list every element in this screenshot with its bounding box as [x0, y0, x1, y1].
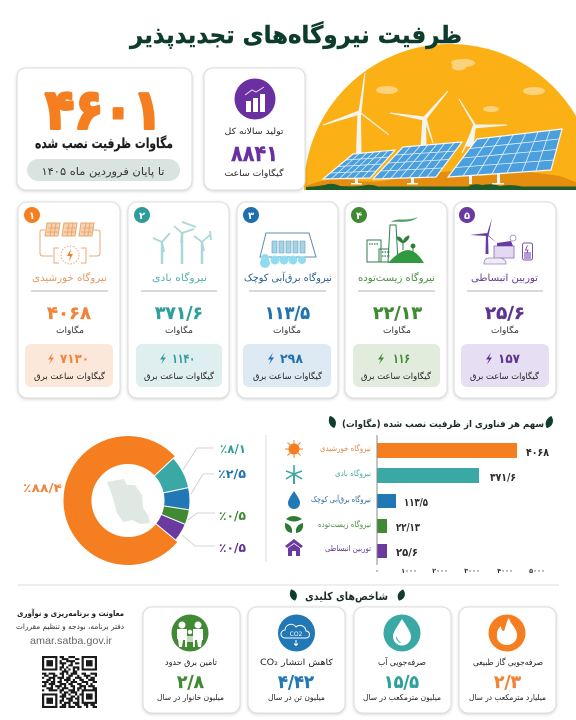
capacity value: ۴۰۶۸ [47, 303, 91, 324]
bar labels: نیروگاه برق‌آبی کوچک [311, 494, 371, 504]
plant name: نیروگاه زیست‌توده [358, 272, 435, 284]
energy box: گیگاوات ساعت برق [144, 371, 215, 382]
panel: installed capacity [17, 68, 192, 190]
badge 5: ۵ [464, 211, 470, 222]
illustration: sun, wind turbines and solar panels [304, 44, 576, 190]
capacity unit: مگاوات [383, 325, 411, 336]
panel: organization info [16, 608, 124, 707]
capacity caption: مگاوات ظرفیت نصب شده [35, 135, 173, 152]
capacity unit: مگاوات [165, 325, 193, 336]
badge 3 [243, 207, 259, 223]
icon: hydro dam [260, 233, 316, 268]
indicator value: ۴/۴۲ [278, 672, 314, 693]
date pill [27, 159, 180, 181]
icon: recycle leaves [285, 516, 303, 533]
bar labels: نیروگاه بادی [335, 468, 371, 478]
capacity unit: مگاوات [56, 325, 84, 336]
panel: households supplied [143, 607, 240, 713]
axis ticks: ۵۰۰۰ [529, 567, 545, 575]
capacity value: ۱۱۳/۵ [265, 303, 310, 324]
energy box: ۱۱۴۰ [172, 352, 195, 367]
plant name: نیروگاه خورشیدی [32, 272, 107, 284]
office name: دفتر برنامه، بودجه و تنظیم مقررات [16, 622, 124, 631]
indicator value: ۲/۳ [494, 672, 521, 693]
bar labels [311, 443, 371, 553]
icon: solar panels and battery [40, 223, 100, 264]
bar values: ۳۷۱/۶ [490, 471, 516, 484]
icon: house [285, 539, 303, 556]
bar labels: نیروگاه زیست‌توده [318, 519, 371, 529]
capacity unit: مگاوات [491, 325, 519, 336]
axis ticks: ۴۰۰۰ [497, 567, 513, 575]
indicator label: کاهش انتشار CO₂ [260, 658, 334, 668]
icon: family [172, 614, 208, 652]
panel: organization info: معاونت و برنامه‌ریزی و نوآوری [17, 608, 124, 618]
energy box [25, 344, 113, 387]
panel: natural gas saving [459, 607, 556, 713]
icon: water drop [288, 491, 300, 509]
donut chart [23, 436, 246, 566]
indicator label: صرفه‌جویی گاز طبیعی [473, 657, 543, 668]
annual label: تولید سالانه کل [224, 127, 284, 137]
panel: expansion turbine [454, 202, 556, 398]
panel: water saving [354, 607, 451, 713]
axis ticks: ۲۰۰۰ [432, 567, 448, 575]
date pill: تا پایان فروردین ماه ۱۴۰۵ [42, 166, 165, 178]
axis ticks: ۱۰۰۰ [401, 567, 417, 575]
bar values [396, 446, 549, 559]
bar values: ۱۱۳/۵ [404, 496, 428, 509]
indicator unit: میلیون تن در سال [268, 693, 325, 702]
bar labels: نیروگاه خورشیدی [320, 443, 371, 453]
panel: annual production [204, 68, 305, 190]
icon: leaf [327, 415, 338, 429]
donut percentage labels: ٪۸۸/۴ [23, 481, 62, 495]
panel: solar plant [18, 202, 120, 398]
energy box [136, 344, 222, 387]
indicator unit: میلیون خانوار در سال [157, 693, 224, 702]
capacity value: ۲۵/۶ [485, 303, 525, 324]
capacity unit: مگاوات [273, 325, 301, 336]
donut percentage labels: ٪۰/۵ [219, 509, 246, 523]
indicator unit: میلیون مترمکعب در سال [363, 693, 441, 702]
icon: wind turbine [286, 465, 302, 484]
bar labels: توربین انبساطی [325, 544, 371, 553]
heading: technology share [327, 415, 555, 430]
plant name: توربین انبساطی [471, 273, 538, 284]
indicator value: ۲/۸ [177, 672, 204, 693]
energy box [353, 344, 440, 387]
bar values: ۴۰۶۸ [526, 446, 549, 459]
plant name: نیروگاه برق‌آبی کوچک [244, 271, 332, 284]
bar values: ۲۵/۶ [396, 546, 418, 559]
donut percentage labels: ٪۰/۵ [219, 541, 246, 555]
panel: small hydro plant [237, 202, 338, 398]
axis ticks: ۳۰۰۰ [464, 567, 480, 575]
energy box: گیگاوات ساعت برق [361, 371, 432, 382]
badge 1: ۱ [29, 211, 35, 222]
heading: technology share: سهم هر فناوری از ظرفیت نصب شده (مگاوات) [342, 418, 544, 430]
indicator value: ۱۵/۵ [384, 672, 419, 693]
icon: wind turbines [153, 222, 211, 264]
panel: CO2 reduction [248, 607, 345, 713]
icon: province map [107, 479, 150, 524]
energy box: ۷۱۳۰ [60, 352, 89, 367]
energy box: گیگاوات ساعت برق [470, 371, 540, 382]
panel: biomass plant [345, 202, 447, 398]
plant name: نیروگاه بادی [152, 272, 207, 284]
energy box [243, 344, 331, 387]
energy box: گیگاوات ساعت برق [34, 371, 106, 382]
title: ظرفیت نیروگاه‌های تجدیدپذیر [129, 21, 462, 49]
panel: wind plant [128, 202, 229, 398]
badge 4 [351, 207, 367, 223]
QR code [42, 657, 97, 707]
bar values: ۲۲/۱۳ [396, 521, 420, 534]
capacity value: ۳۷۱/۶ [155, 303, 203, 324]
annual unit: گیگاوات ساعت [224, 168, 285, 179]
bar chart [311, 435, 549, 575]
badge 1 [24, 207, 40, 223]
icon: turbine, house, battery [470, 218, 532, 264]
axis ticks [375, 567, 545, 575]
indicator unit: میلیارد مترمکعب در سال [469, 693, 546, 702]
icon: water drop [384, 614, 420, 652]
website: amar.satba.gov.ir [30, 635, 113, 647]
big number 4601: ۴۶۰۱ [45, 78, 162, 142]
icon: sun [285, 440, 303, 458]
icon: growth chart [234, 78, 276, 120]
badge 2 [134, 207, 150, 223]
energy box: گیگاوات ساعت برق [253, 371, 323, 382]
icon: leaf [288, 588, 299, 602]
badge 2: ۲ [139, 211, 145, 222]
donut percentage labels: ٪۲/۵ [218, 467, 246, 481]
energy box [461, 344, 549, 387]
energy box: ۱۱۶ [393, 352, 410, 367]
heading: key indicators: شاخص‌های کلیدی [305, 590, 388, 603]
badge 3: ۳ [248, 211, 254, 222]
energy box: ۲۹۸ [280, 352, 303, 367]
donut percentage labels: ٪۸/۱ [220, 442, 246, 456]
icon: leaf [544, 415, 555, 429]
capacity value: ۲۲/۱۳ [373, 303, 422, 324]
axis ticks: ۰ [375, 567, 379, 575]
indicator label: صرفه‌جویی آب [378, 656, 426, 668]
icon: flame [488, 614, 526, 652]
donut percentage labels [23, 442, 246, 555]
energy box: ۱۵۷ [498, 352, 520, 367]
donut leader lines [182, 448, 215, 546]
indicator label: تامین برق حدود [165, 658, 218, 668]
icon: leaf [396, 588, 407, 602]
badge 5 [459, 207, 475, 223]
icon: CO2 cloud: CO2 [290, 631, 303, 638]
annual value: ۸۸۴۱ [231, 142, 278, 167]
icon: biomass factory [367, 217, 424, 263]
badge 4: ۴ [356, 211, 362, 222]
